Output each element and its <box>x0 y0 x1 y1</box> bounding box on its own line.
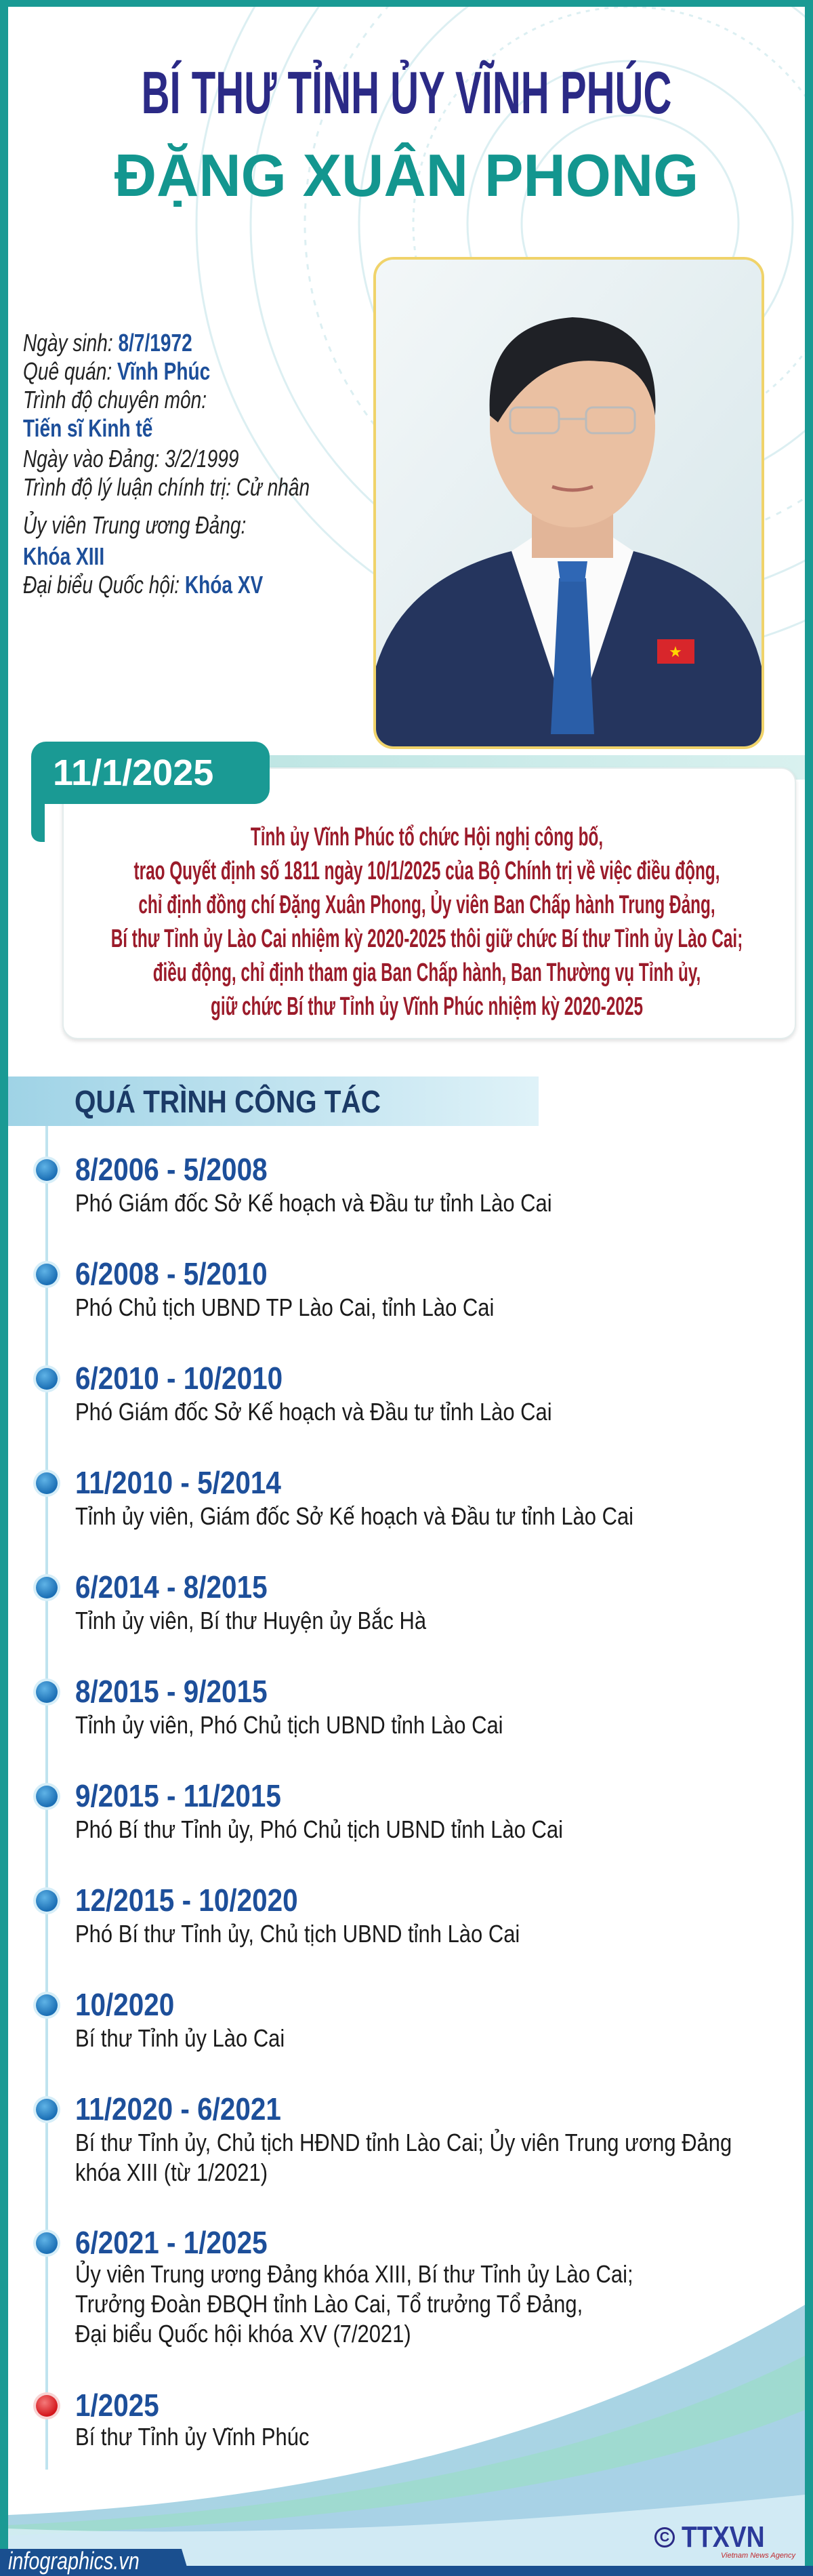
timeline line <box>45 1126 48 2470</box>
background drum pattern <box>195 7 805 637</box>
item 2 <box>33 1256 494 1321</box>
item 8: 12/2015 - 10/2020 <box>75 1883 298 1918</box>
item 5 <box>33 1569 427 1634</box>
section heading band: QUÁ TRÌNH CÔNG TÁC <box>75 1084 381 1119</box>
info block: Ngày sinh: 8/7/1972 <box>23 329 192 357</box>
info block: Ngày vào Đảng: 3/2/1999 <box>23 445 238 472</box>
item 10 <box>33 2091 732 2186</box>
item 4: 11/2010 - 5/2014 <box>75 1465 281 1500</box>
event text: trao Quyết định số 1811 ngày 10/1/2025 của Bộ Chính trị về việc điều động, <box>134 857 720 885</box>
item 6: Tỉnh ủy viên, Phó Chủ tịch UBND tỉnh Lào Cai <box>75 1711 503 1739</box>
title <box>114 59 699 209</box>
item 12: 1/2025 <box>75 2388 159 2423</box>
logo TTXVN <box>654 2520 795 2560</box>
item 4 <box>33 1465 633 1530</box>
event text: giữ chức Bí thư Tỉnh ủy Vĩnh Phúc nhiệm kỳ 2020-2025 <box>211 992 643 1021</box>
footer tab: infographics.vn: infographics.vn <box>8 2547 140 2575</box>
item 10: khóa XIII (từ 1/2021) <box>75 2158 268 2186</box>
event text: điều động, chỉ định tham gia Ban Chấp hành, Ban Thường vụ Tỉnh ủy, <box>153 959 701 987</box>
item 3: 6/2010 - 10/2010 <box>75 1361 283 1396</box>
logo TTXVN: C <box>660 2530 669 2545</box>
photo portrait <box>373 257 764 749</box>
info block: Khóa XIII <box>23 542 104 570</box>
logo TTXVN: Vietnam News Agency <box>721 2552 795 2560</box>
item 5: Tỉnh ủy viên, Bí thư Huyện ủy Bắc Hà <box>75 1607 426 1634</box>
date tag: 11/1/2025 <box>53 752 213 793</box>
item 7: Phó Bí thư Tỉnh ủy, Phó Chủ tịch UBND tỉnh Lào Cai <box>75 1815 563 1843</box>
info block: Trình độ chuyên môn: <box>23 386 207 414</box>
info block <box>23 329 310 599</box>
bottom waves <box>8 2305 805 2566</box>
item 3 <box>33 1361 552 1426</box>
item 10: Bí thư Tỉnh ủy, Chủ tịch HĐND tỉnh Lào Cai; Ủy viên Trung ương Đảng <box>75 2129 732 2156</box>
event panel <box>31 742 805 1043</box>
item 9 <box>33 1987 285 2052</box>
item 2: 6/2008 - 5/2010 <box>75 1256 268 1291</box>
item 4: Tỉnh ủy viên, Giám đốc Sở Kế hoạch và Đầu tư tỉnh Lào Cai <box>75 1502 633 1530</box>
item 5: 6/2014 - 8/2015 <box>75 1569 268 1605</box>
teal strip <box>268 755 805 780</box>
content box <box>62 767 796 1039</box>
item 8 <box>33 1883 520 1948</box>
date tag <box>31 742 270 804</box>
teal curl <box>31 782 45 842</box>
item 7: 9/2015 - 11/2015 <box>75 1778 281 1813</box>
footer tab: infographics.vn <box>0 2549 190 2576</box>
photo portrait: ★ <box>669 643 682 660</box>
item 8: Phó Bí thư Tỉnh ủy, Chủ tịch UBND tỉnh Lào Cai <box>75 1920 520 1948</box>
item 9: 10/2020 <box>75 1987 174 2022</box>
item 7 <box>33 1778 563 1843</box>
title line 2: ĐẶNG XUÂN PHONG <box>114 142 699 209</box>
item 12: Bí thư Tỉnh ủy Vĩnh Phúc <box>75 2423 309 2451</box>
item 11 <box>33 2225 633 2348</box>
item 11: Ủy viên Trung ương Đảng khóa XIII, Bí thư Tỉnh ủy Lào Cai; <box>75 2260 633 2288</box>
event text <box>111 823 743 1021</box>
event text: Tỉnh ủy Vĩnh Phúc tổ chức Hội nghị công bố, <box>251 823 603 851</box>
item 11: Trưởng Đoàn ĐBQH tỉnh Lào Cai, Tổ trưởng Tổ Đảng, <box>75 2290 583 2318</box>
title line 1: BÍ THƯ TỈNH ỦY VĨNH PHÚC <box>142 59 671 126</box>
section heading band <box>8 1076 539 1126</box>
item 1: Phó Giám đốc Sở Kế hoạch và Đầu tư tỉnh Lào Cai <box>75 1189 552 1217</box>
item 12 <box>33 2388 309 2451</box>
item 10: 11/2020 - 6/2021 <box>75 2091 281 2127</box>
item 1: 8/2006 - 5/2008 <box>75 1152 268 1187</box>
item 3: Phó Giám đốc Sở Kế hoạch và Đầu tư tỉnh Lào Cai <box>75 1398 552 1426</box>
item 6: 8/2015 - 9/2015 <box>75 1674 268 1709</box>
event text: chỉ định đồng chí Đặng Xuân Phong, Ủy viên Ban Chấp hành Trung Đảng, <box>138 891 715 919</box>
item 11: 6/2021 - 1/2025 <box>75 2225 268 2260</box>
item 9: Bí thư Tỉnh ủy Lào Cai <box>75 2024 285 2052</box>
footer bar <box>0 2566 813 2576</box>
info block: Trình độ lý luận chính trị: Cử nhân <box>23 473 310 501</box>
item 6 <box>33 1674 503 1739</box>
info block: Đại biểu Quốc hội: Khóa XV <box>23 571 263 599</box>
item 2: Phó Chủ tịch UBND TP Lào Cai, tỉnh Lào Cai <box>75 1293 494 1321</box>
info block: Quê quán: Vĩnh Phúc <box>23 357 210 385</box>
info block: Ủy viên Trung ương Đảng: <box>23 511 246 539</box>
event text: Bí thư Tỉnh ủy Lào Cai nhiệm kỳ 2020-2025 thôi giữ chức Bí thư Tỉnh ủy Lào Cai; <box>111 925 743 953</box>
item 11: Đại biểu Quốc hội khóa XV (7/2021) <box>75 2320 411 2348</box>
info block: Tiến sĩ Kinh tế <box>23 414 152 442</box>
item 1 <box>33 1152 552 1217</box>
logo TTXVN: TTXVN <box>682 2520 765 2554</box>
